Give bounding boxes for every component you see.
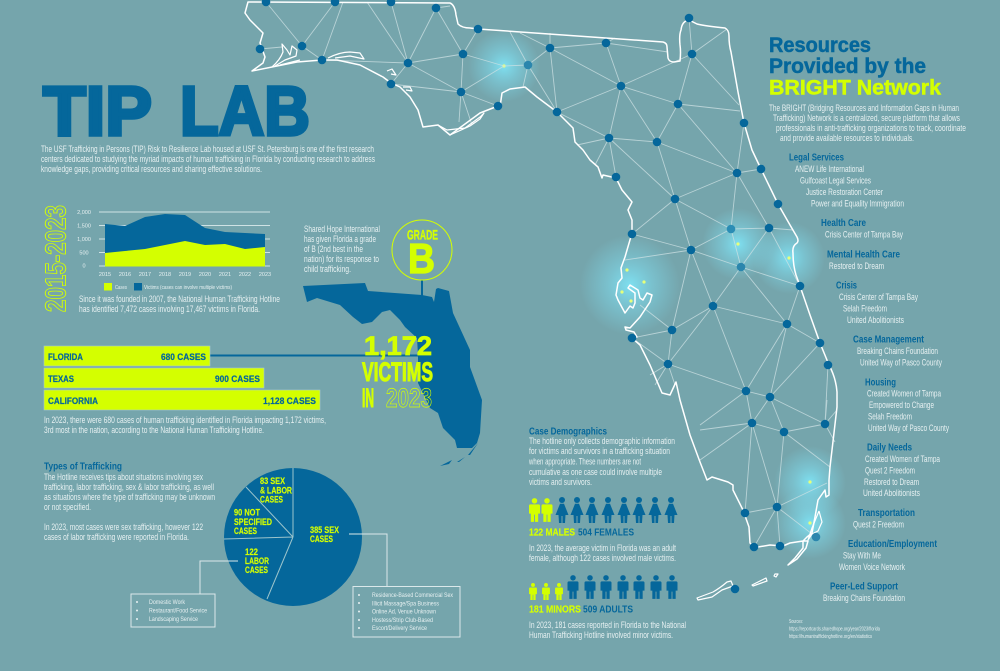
shared hope note: child trafficking. <box>304 264 351 275</box>
resource: crisis: Crisis Center of Tampa Bay <box>839 292 918 303</box>
slice label: sex and labor: & LABOR <box>260 486 292 496</box>
grade badge <box>392 220 452 296</box>
slice label: not specified: CASES <box>234 526 257 537</box>
resource: daily needs: Quest 2 Freedom <box>865 466 915 476</box>
sources <box>789 619 881 640</box>
gender paragraph: female, although 122 cases involved male victims. <box>529 553 676 564</box>
title: LAB <box>180 72 310 150</box>
resource: transportation: Quest 2 Freedom <box>853 520 904 530</box>
resource: peer-led support: Breaking Chains Foundation <box>823 593 905 604</box>
body: The Hotline receives tips about situations involving sex <box>44 472 203 483</box>
resource: daily needs: Daily Needs <box>867 442 912 454</box>
slice label: sex and labor: CASES <box>260 494 283 506</box>
heading: Types of Trafficking <box>44 460 122 472</box>
pie chart: trafficking types <box>224 468 362 606</box>
victims headline: 1,172 <box>364 331 432 361</box>
x axis labels: 2016 <box>119 272 131 278</box>
resource: education and employment: Women Voice Network <box>839 562 905 573</box>
bar: Florida: 680 CASES <box>161 352 206 363</box>
resource: housing: Empowered to Change <box>869 400 934 411</box>
case demographics text <box>528 426 675 488</box>
resource: transportation <box>853 507 915 530</box>
bar: California: 1,128 CASES <box>263 396 316 407</box>
resource: case management <box>853 334 942 368</box>
age paragraph <box>529 620 686 641</box>
gender paragraph <box>529 543 676 564</box>
callout: labor trafficking venues <box>131 561 238 627</box>
callout: sex trafficking venues: Residence-Based Commercial Sex <box>372 592 454 599</box>
resources heading: Provided by the <box>769 55 926 78</box>
slice label: not specified: 90 NOT <box>234 508 260 518</box>
resource: crisis <box>836 280 918 326</box>
slice label: labor: LABOR <box>245 556 269 567</box>
heading: Case Demographics <box>529 426 607 438</box>
body: trafficking, labor trafficking, sex & labor trafficking, as well <box>44 482 214 493</box>
resource: case management: United Way of Pasco County <box>860 358 942 368</box>
body: cumulative as one case could involve multiple <box>529 467 662 478</box>
x axis labels: 2017 <box>139 272 151 278</box>
legend <box>104 283 232 291</box>
bar: California <box>44 390 320 410</box>
hotline note: Since it was founded in 2007, the National Human Trafficking Hotline <box>79 294 280 305</box>
x axis labels: 2019 <box>179 272 191 278</box>
intro paragraph: centers dedicated to studying the myriad impacts of human trafficking in Florida by conducting research to address <box>41 154 375 165</box>
resource: health care: Crisis Center of Tampa Bay <box>825 230 903 240</box>
resource: legal services: Power and Equality Immigration <box>811 198 904 210</box>
x axis labels: 2020 <box>199 272 211 278</box>
callout: sex trafficking venues <box>349 534 460 637</box>
resource: case management: Breaking Chains Foundation <box>857 346 938 357</box>
resource: legal services <box>789 152 904 210</box>
comparison paragraph <box>44 415 326 436</box>
grade badge: B <box>408 235 435 282</box>
resource: daily needs: United Abolitionists <box>863 488 920 499</box>
bar: Florida: FLORIDA <box>48 352 83 363</box>
vertical year label: 2015-2023 <box>40 205 72 312</box>
body: when appropriate. These numbers are not <box>528 456 641 468</box>
callout: labor trafficking venues: Restaurant/Food Service <box>149 608 207 614</box>
slice label: sex <box>310 525 340 545</box>
hotline note: has identified 7,472 cases involving 17,467 victims in Florida. <box>79 304 260 315</box>
icon row: minors and adults <box>529 575 678 600</box>
slice label: sex: CASES <box>310 534 333 545</box>
comparison paragraph: In 2023, there were 680 cases of human trafficking identified in Florida impacting 1,172 victims, <box>44 415 326 426</box>
legend: Cases <box>115 285 127 291</box>
slice label: not specified: SPECIFIED <box>234 517 272 528</box>
resource: mental health care: Restored to Dream <box>829 261 884 272</box>
resource: crisis: United Abolitionists <box>847 315 904 326</box>
sources: https://reportcards.sharedhope.org/year/2023/florida <box>789 626 881 632</box>
y axis labels: 1,500 <box>77 224 91 230</box>
y axis labels <box>77 210 91 270</box>
resource: education and employment: Education/Employment <box>848 538 937 550</box>
y axis labels: 500 <box>79 250 89 256</box>
slice label: sex and labor: 83 SEX <box>260 476 286 487</box>
resources heading <box>769 34 941 100</box>
resource: legal services: Legal Services <box>789 152 844 164</box>
glows: program locations <box>468 30 846 559</box>
resource: crisis: Selah Freedom <box>843 304 887 314</box>
intro paragraph <box>41 144 375 175</box>
victims headline: IN <box>362 383 374 413</box>
resource: transportation: Transportation <box>858 507 915 519</box>
title <box>43 72 310 150</box>
y axis labels: 1,000 <box>77 237 91 243</box>
resource: legal services: Gulfcoast Legal Services <box>800 176 871 186</box>
shared hope note: nation) for its response to <box>304 254 379 265</box>
types of trafficking text <box>44 460 215 543</box>
callout: sex trafficking venues: Online Ad, Venue Unknown <box>372 608 436 616</box>
resource: housing <box>865 376 949 434</box>
resource: education and employment: Stay With Me <box>843 550 881 562</box>
sources: https://humantraffickinghotline.org/en/statistics <box>789 634 872 640</box>
resource: daily needs: Created Women of Tampa <box>865 454 940 465</box>
resource: health care: Health Care <box>821 217 866 229</box>
resources heading: BRIGHT Network <box>769 76 941 100</box>
x axis labels <box>99 272 271 278</box>
bar: Florida <box>44 346 210 366</box>
slice label: sex: 385 SEX <box>310 525 340 536</box>
bar: California: CALIFORNIA <box>48 396 98 407</box>
slice label: sex and labor <box>260 476 292 506</box>
y axis labels: 2,000 <box>77 210 91 216</box>
resource: legal services: Justice Restoration Center <box>806 187 883 198</box>
slice label: labor: 122 <box>245 547 258 558</box>
slice label: labor: CASES <box>245 565 268 576</box>
callout: labor trafficking venues: Landscaping Service <box>149 616 198 623</box>
body: cases of labor trafficking were reported in Florida. <box>44 532 189 543</box>
title: TIP <box>43 72 152 150</box>
resource: health care <box>821 217 903 240</box>
comparison paragraph: 3rd most in the nation, according to the National Human Trafficking Hotline. <box>44 425 264 436</box>
resources intro paragraph <box>769 103 966 144</box>
callout: sex trafficking venues: Hostess/Strip Club-Based <box>372 617 433 624</box>
grade badge: GRADE <box>407 226 438 242</box>
resource: daily needs <box>863 442 940 499</box>
gender counts: 504 FEMALES <box>578 526 634 538</box>
age paragraph: In 2023, 181 cases reported in Florida to the National <box>529 620 686 631</box>
resource: mental health care: Mental Health Care <box>827 248 900 260</box>
resource: housing: United Way of Pasco County <box>868 423 949 434</box>
resource: legal services: ANEW Life International <box>795 164 864 175</box>
resource: housing: Housing <box>865 376 896 388</box>
body: In 2023, most cases were sex trafficking, however 122 <box>44 522 203 533</box>
callout: labor trafficking venues: Domestic Work <box>149 599 186 606</box>
intro paragraph: The USF Trafficking in Persons (TIP) Risk to Resilience Lab housed at USF St. Petersburg is one of the first research <box>41 144 374 155</box>
shared hope note: Shared Hope International <box>304 224 380 235</box>
shared hope note: has given Florida a grade <box>304 234 376 245</box>
victims headline <box>362 331 433 413</box>
icon row: males and females <box>529 497 678 523</box>
age counts: 181 MINORS <box>529 604 581 616</box>
gender paragraph: In 2023, the average victim in Florida was an adult <box>529 543 676 554</box>
florida network map <box>245 0 846 600</box>
resource: housing: Created Women of Tampa <box>867 388 941 400</box>
cases area <box>105 241 265 266</box>
x axis labels: 2023 <box>259 272 271 278</box>
body: or not specified. <box>44 502 91 513</box>
resources heading: Resources <box>769 34 871 57</box>
resource: mental health care <box>827 248 900 272</box>
resource: daily needs: Restored to Dream <box>864 477 919 488</box>
intro paragraph: knowledge gaps, providing critical resources and sharing effective solutions. <box>41 164 262 175</box>
body <box>528 436 675 488</box>
state comparison bars <box>44 346 432 410</box>
victims headline: VICTIMS <box>362 357 433 387</box>
resource: crisis: Crisis <box>836 280 857 292</box>
bar: Texas: 900 CASES <box>215 374 260 385</box>
resource: peer-led support <box>823 580 905 604</box>
x axis labels: 2022 <box>239 272 251 278</box>
age counts: 509 ADULTS <box>583 604 633 616</box>
area chart: cases and victims <box>77 210 271 291</box>
gender counts: 122 MALES <box>529 526 575 538</box>
callout: sex trafficking venues: Escort/Delivery Service <box>372 625 427 632</box>
body <box>44 472 215 543</box>
age paragraph: Human Trafficking Hotline involved minor victims. <box>529 630 673 641</box>
resource: case management: Case Management <box>853 334 924 346</box>
callout: sex trafficking venues: Illicit Massage/Spa Business <box>372 600 440 608</box>
resource: peer-led support: Peer-Led Support <box>830 580 898 592</box>
gender counts <box>529 526 634 538</box>
hotline note <box>79 294 280 315</box>
sources: Sources: <box>789 619 803 625</box>
bar: Texas: TEXAS <box>48 374 74 385</box>
x axis labels: 2015 <box>99 272 111 278</box>
body: as situations where the type of trafficking may be unknown <box>44 492 215 503</box>
legend: Victims (cases can involve multiple victims) <box>144 285 232 291</box>
body: The hotline only collects demographic information <box>529 436 675 447</box>
body: for victims and survivors in a trafficking situation <box>529 446 670 457</box>
florida silhouette <box>303 283 482 466</box>
bar: Texas <box>44 368 264 388</box>
resource: education and employment <box>839 538 937 573</box>
victims area <box>105 214 265 266</box>
slice label: labor <box>245 547 269 576</box>
shared hope note: of B (2nd best in the <box>304 244 363 255</box>
victims headline: 2023 <box>386 383 432 413</box>
x axis labels: 2021 <box>219 272 231 278</box>
x axis labels: 2018 <box>159 272 171 278</box>
body: victims and survivors. <box>529 477 592 488</box>
age counts <box>529 604 633 616</box>
resources intro paragraph: and provide available resources to individuals. <box>780 133 914 144</box>
shared hope note <box>304 224 380 275</box>
resource: housing: Selah Freedom <box>868 412 912 422</box>
slice label: not specified <box>234 508 272 537</box>
y axis labels: 0 <box>82 264 86 270</box>
